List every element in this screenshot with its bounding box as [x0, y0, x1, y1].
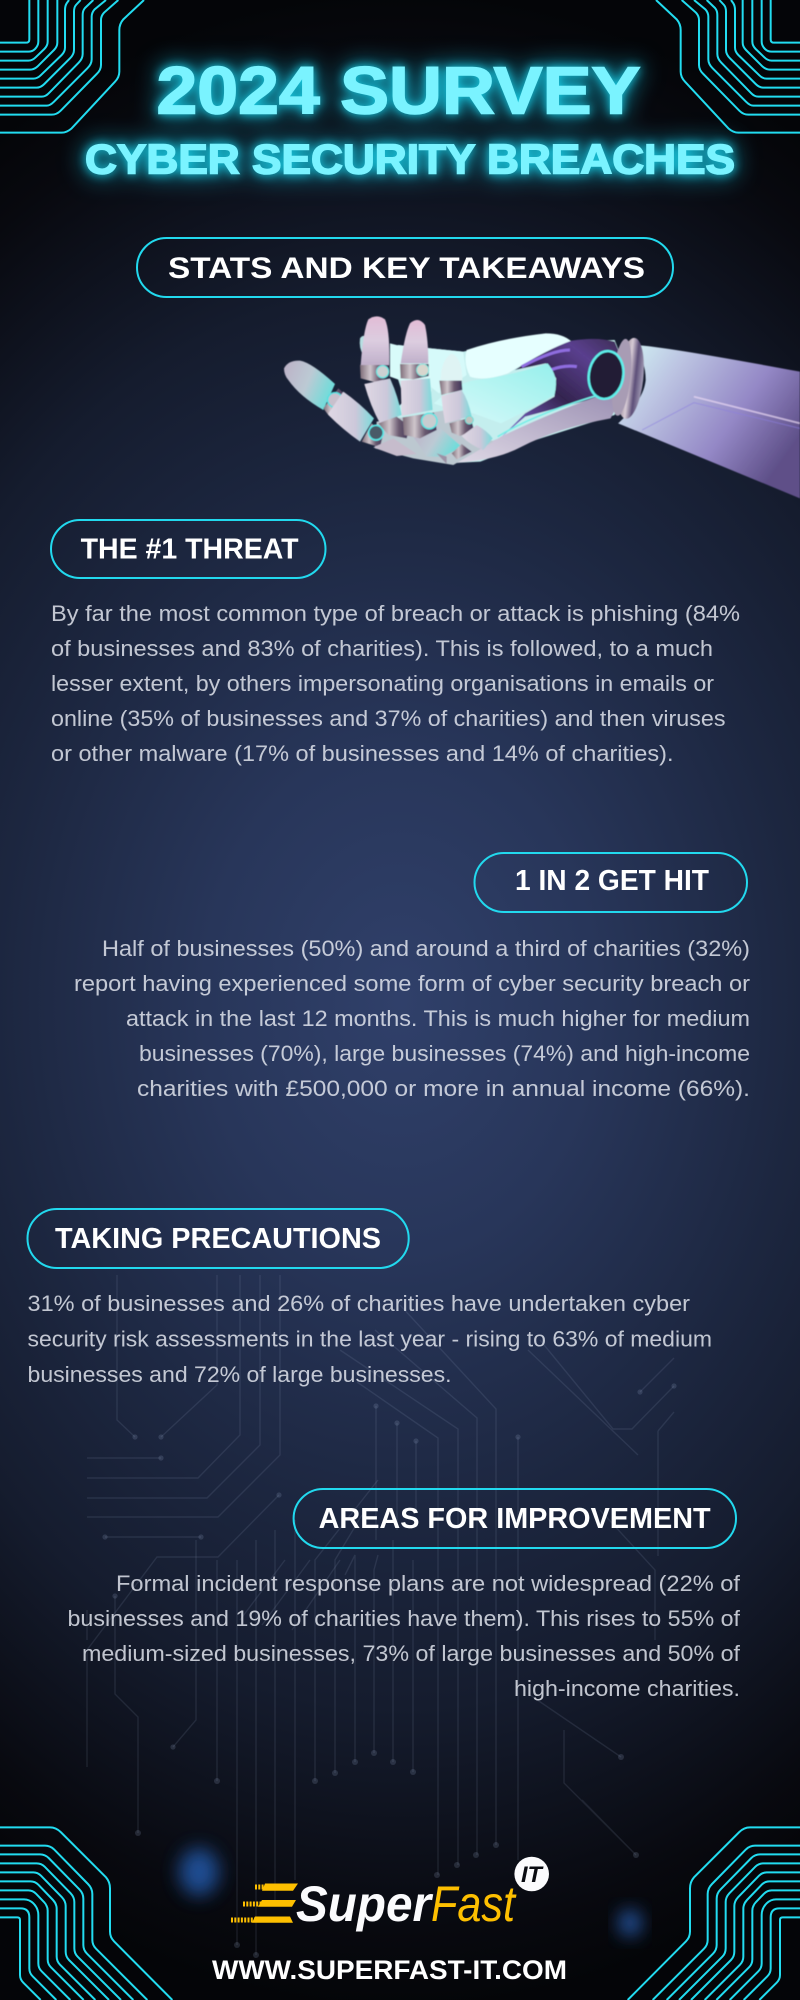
finger: small	[441, 353, 462, 381]
text block: the #1 threat: or other malware (17% of businesses and 14% of charities).	[51, 741, 674, 766]
text block: taking precautions: businesses and 72% of large businesses.	[28, 1362, 451, 1387]
heading pill: the #1 threat	[51, 520, 326, 578]
blue glow: right	[619, 1910, 641, 1936]
finger: tall	[361, 316, 389, 365]
circuit corner: bottom right	[628, 1827, 800, 2000]
illustration: robot hand	[284, 316, 800, 498]
wrist ring	[613, 337, 648, 420]
lower palm	[439, 391, 617, 463]
text block: the #1 threat: of businesses and 83% of charities). This is followed, to a much	[51, 636, 713, 661]
heading pill: 1 in 2 get hit: 1 IN 2 GET HIT	[515, 865, 709, 897]
heading pill: taking precautions	[28, 1209, 409, 1268]
text block: 1 in 2 get hit: report having experienced some form of cyber security breach or	[74, 971, 750, 996]
text block: the #1 threat: online (35% of businesses and 37% of charities) and then viruses	[51, 706, 726, 731]
title	[85, 54, 735, 182]
text block: the #1 threat: lesser extent, by others impersonating organisations in emails or	[51, 671, 714, 696]
website url: WWW.SUPERFAST-IT.COM	[212, 1955, 567, 1985]
text block: taking precautions	[28, 1291, 712, 1387]
fingers	[284, 316, 493, 465]
heading pill: areas for improvement: AREAS FOR IMPROVEMENT	[319, 1503, 711, 1535]
text block: areas for improvement	[68, 1571, 741, 1701]
knuckle base	[375, 410, 493, 465]
text block: 1 in 2 get hit: Half of businesses (50%) and around a third of charities (32%)	[102, 936, 750, 961]
text block: areas for improvement: high-income charities.	[514, 1676, 740, 1701]
finger: left	[284, 361, 335, 410]
thumb-side bridge	[398, 345, 467, 393]
circuit corner: top left	[0, 0, 144, 133]
blue glow: left	[179, 1848, 219, 1896]
back of hand	[465, 333, 572, 379]
text block: areas for improvement: medium-sized businesses, 73% of large businesses and 50% of	[82, 1641, 741, 1666]
title: CYBER SECURITY BREACHES	[85, 136, 735, 182]
text block: areas for improvement: businesses and 19% of charities have them). This rises to 55% of	[68, 1606, 741, 1631]
heading pill: taking precautions: TAKING PRECAUTIONS	[55, 1223, 381, 1255]
text block: 1 in 2 get hit: charities with £500,000 or more in annual income (66%).	[137, 1076, 750, 1101]
logo IT badge	[514, 1857, 549, 1891]
logo speed stripes	[231, 1884, 298, 1923]
text block: 1 in 2 get hit	[74, 936, 750, 1101]
logo: SuperFast IT: Fast	[431, 1876, 517, 1932]
heading pill: stats and key takeaways	[137, 238, 673, 297]
heading pill: stats and key takeaways: STATS AND KEY TAKEAWAYS	[168, 252, 645, 285]
palm	[434, 363, 556, 423]
chrome wrist	[501, 339, 625, 437]
heading pill: areas for improvement	[294, 1489, 736, 1548]
forearm	[377, 333, 800, 498]
hand base silhouette	[377, 333, 625, 463]
text block: taking precautions: 31% of businesses and 26% of charities have undertaken cyber	[28, 1291, 690, 1316]
text block: the #1 threat	[51, 601, 740, 766]
title: 2024 SURVEY	[156, 54, 640, 128]
logo IT badge: IT	[521, 1862, 544, 1887]
text block: 1 in 2 get hit: attack in the last 12 months. This is much higher for medium	[126, 1006, 750, 1031]
heading pill: 1 in 2 get hit	[474, 853, 747, 912]
circuit corner: top right	[656, 0, 800, 133]
text block: the #1 threat: By far the most common type of breach or attack is phishing (84%	[51, 601, 740, 626]
text block: 1 in 2 get hit: businesses (70%), large businesses (74%) and high-income	[139, 1041, 750, 1066]
logo: SuperFast IT	[231, 1857, 549, 1932]
finger: back thumb	[360, 336, 367, 355]
finger: middle	[401, 320, 428, 363]
heading pill: the #1 threat: THE #1 THREAT	[81, 534, 299, 566]
background circuit pattern	[87, 1275, 677, 1958]
text block: taking precautions: security risk assessments in the last year - rising to 63% of medium	[28, 1326, 712, 1352]
logo wordmark: Super	[296, 1876, 433, 1932]
text block: areas for improvement: Formal incident response plans are not widespread (22% of	[116, 1571, 741, 1596]
circuit corner: bottom left	[0, 1827, 172, 2000]
